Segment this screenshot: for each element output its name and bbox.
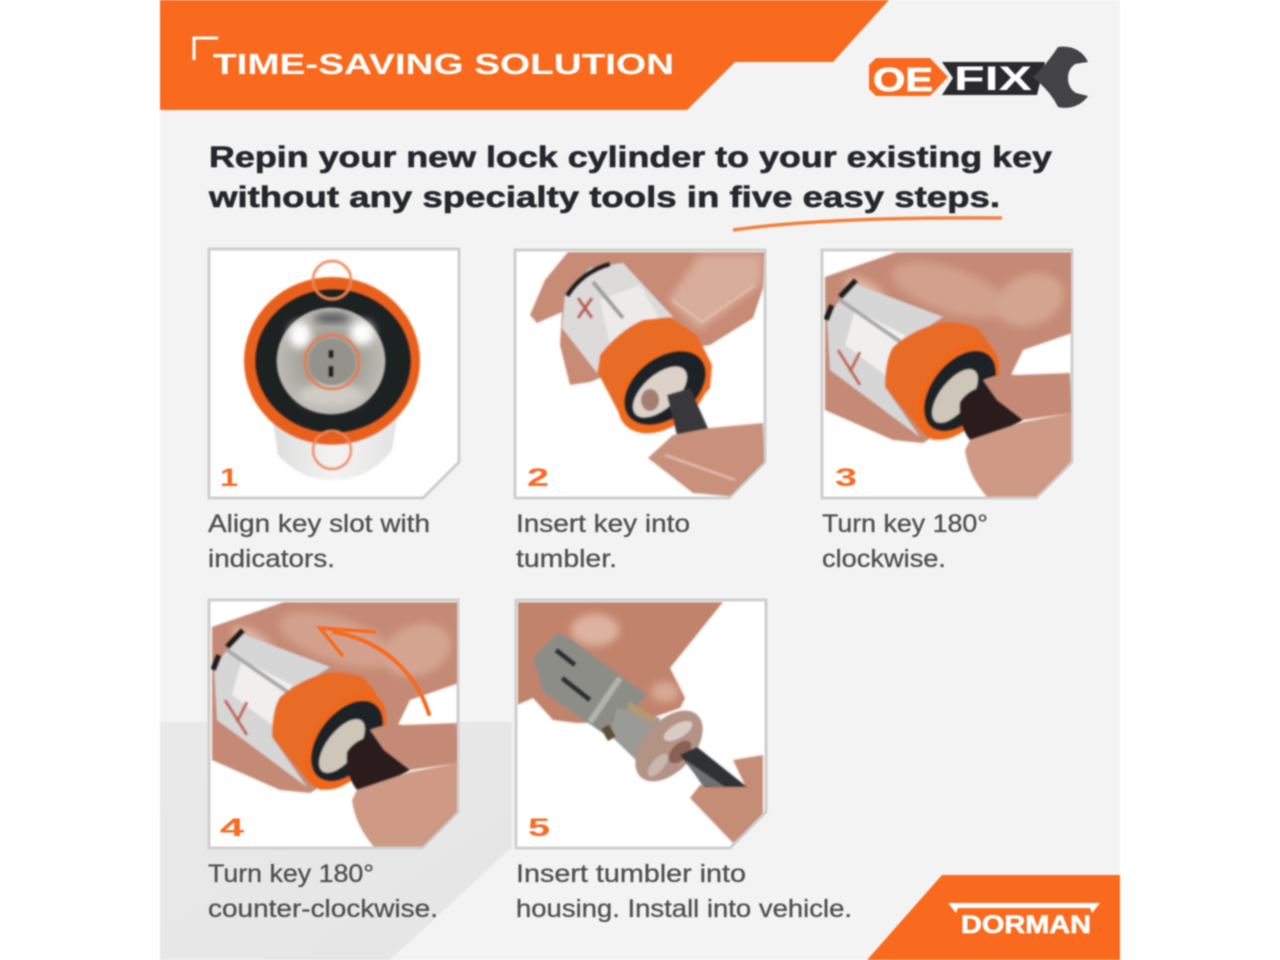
step number: 5 bbox=[528, 814, 550, 842]
caption: step 4 bbox=[208, 860, 438, 923]
caption: step 4: Turn key 180° bbox=[208, 860, 374, 888]
intro heading: Repin your new lock cylinder to your existing key bbox=[209, 141, 1052, 174]
lock cylinder front view bbox=[244, 261, 420, 480]
logo: Dorman bbox=[948, 903, 1100, 939]
caption: step 5: Insert tumbler into bbox=[516, 860, 746, 888]
title: TIME-SAVING SOLUTION bbox=[213, 49, 674, 81]
page background bbox=[160, 0, 1120, 960]
underline accent bbox=[733, 218, 1002, 230]
bracket icon bbox=[194, 38, 218, 60]
photo: turning key clockwise bbox=[825, 251, 1072, 497]
header banner bbox=[160, 0, 889, 110]
panel: step 4 bbox=[209, 600, 459, 848]
caption: step 5 bbox=[516, 860, 852, 923]
logo: OE FIX: OE bbox=[873, 61, 933, 98]
caption: step 2 bbox=[516, 510, 690, 573]
caption: step 1 bbox=[208, 510, 430, 573]
caption: step 3: clockwise. bbox=[822, 545, 946, 573]
logo: Dorman: DORMAN bbox=[961, 911, 1091, 939]
caption: step 3 bbox=[822, 510, 988, 573]
intro heading: without any specialty tools in five easy steps. bbox=[208, 181, 1000, 214]
caption: step 1: Align key slot with bbox=[208, 510, 430, 538]
caption: step 1: indicators. bbox=[208, 545, 335, 573]
footer corner with Dorman logo bbox=[867, 875, 1120, 960]
photo: turning key counter-clockwise bbox=[212, 601, 459, 847]
panel: step 2 bbox=[515, 250, 765, 498]
caption: step 5: housing. Install into vehicle. bbox=[516, 895, 852, 923]
step number: 2 bbox=[527, 464, 549, 492]
caption: step 4: counter-clockwise. bbox=[208, 895, 438, 923]
panel: step 5 bbox=[516, 600, 766, 848]
intro heading bbox=[208, 141, 1052, 214]
logo: OE FIX bbox=[869, 47, 1088, 108]
icon: wrench bbox=[1033, 47, 1088, 108]
caption: step 3: Turn key 180° bbox=[822, 510, 988, 538]
photo: key inserted bbox=[530, 252, 765, 497]
caption: step 2: tumbler. bbox=[516, 545, 617, 573]
panel: step 1 bbox=[209, 249, 459, 498]
photo: tumbler into housing bbox=[517, 602, 763, 843]
caption: step 2: Insert key into bbox=[516, 510, 690, 538]
step number: 4 bbox=[220, 814, 244, 842]
logo: OE FIX: FIX bbox=[954, 60, 1032, 98]
step number: 1 bbox=[220, 464, 238, 492]
step number: 3 bbox=[835, 464, 857, 492]
panel: step 3 bbox=[822, 250, 1072, 498]
arrow: counter-clockwise bbox=[320, 628, 429, 714]
